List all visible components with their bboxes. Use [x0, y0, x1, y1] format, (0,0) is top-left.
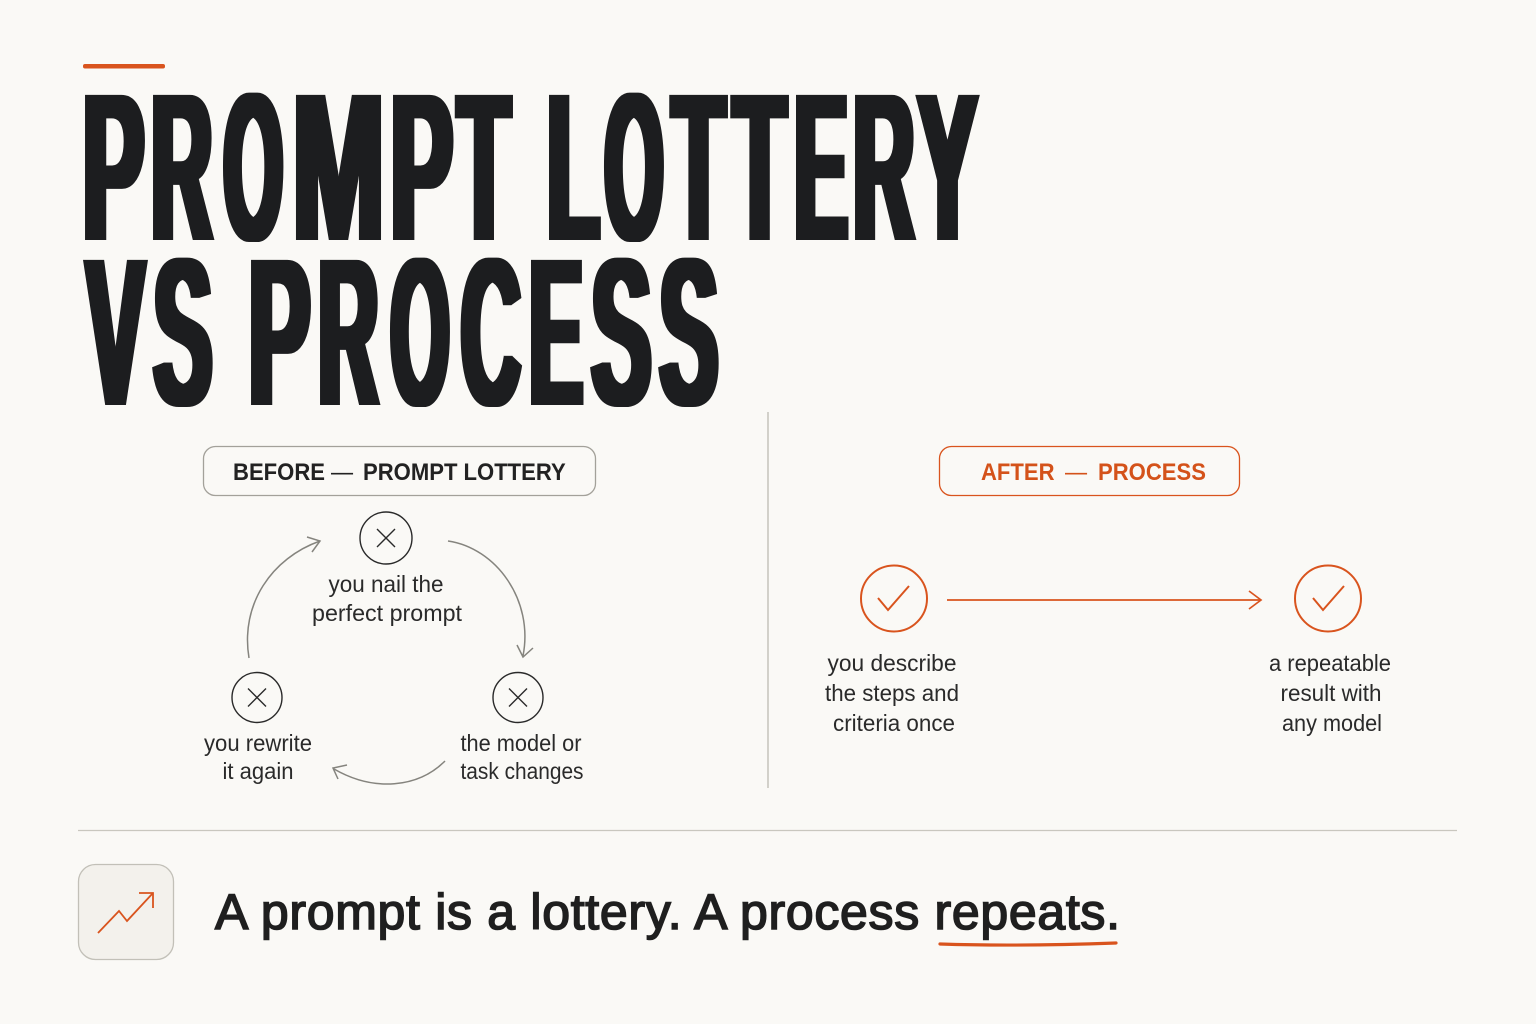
text: you rewrite it again: it again: [222, 758, 294, 784]
after label pill: [940, 446, 1240, 496]
title: E: [530, 214, 583, 450]
before label pill: BEFORE: [233, 458, 331, 485]
title: P: [249, 214, 310, 450]
panel: after: [825, 446, 1391, 736]
text: you describe the steps and criteria once: criteria once: [833, 710, 955, 736]
takeaway statement: A prompt is a lottery. A process repeats.: [215, 884, 1120, 940]
after label pill: PROCESS: [1098, 458, 1206, 485]
accent bar: [83, 64, 165, 68]
icon: check end: [1295, 566, 1361, 632]
text: the model or task changes: [460, 730, 584, 784]
title: [83, 49, 977, 450]
text: a repeatable result with any model: a repeatable: [1269, 650, 1391, 676]
text: you rewrite it again: [204, 730, 312, 784]
before label pill: PROMPT LOTTERY: [363, 458, 566, 485]
vertical divider: [767, 412, 769, 788]
title: S: [660, 214, 718, 450]
title: M: [293, 49, 384, 285]
panel: before: [204, 446, 596, 784]
text: you describe the steps and criteria once: the steps and: [825, 680, 959, 706]
text: you describe the steps and criteria once: [825, 650, 959, 736]
text: the model or task changes: task changes: [460, 758, 584, 784]
horizontal divider: [78, 830, 1457, 832]
title: E: [795, 49, 848, 285]
text: a repeatable result with any model: result with: [1280, 680, 1382, 706]
text: you nail the perfect prompt: [312, 571, 463, 626]
icon: trend chart tile: [78, 864, 174, 960]
title: S: [592, 214, 651, 450]
text: you nail the perfect prompt: you nail the: [328, 571, 444, 597]
icon: x top: [360, 512, 412, 564]
text: Y: [918, 49, 977, 285]
title: T: [458, 49, 510, 285]
before label pill: [204, 446, 596, 496]
title: V: [86, 214, 145, 450]
title: R: [853, 49, 914, 285]
title: R: [318, 214, 378, 450]
arrow: process: [947, 591, 1261, 609]
underline: repeats: [940, 943, 1116, 945]
icon: x left: [232, 672, 282, 722]
text: you describe the steps and criteria once: you describe: [828, 650, 956, 676]
title: T: [672, 49, 725, 285]
arrow: top to right: [448, 541, 533, 657]
text: a repeatable result with any model: [1269, 650, 1391, 736]
icon: check start: [861, 566, 927, 632]
title: O: [391, 214, 449, 450]
title: O: [605, 49, 663, 285]
title: P: [391, 49, 453, 285]
title: S: [154, 214, 212, 450]
icon: x right: [493, 672, 543, 722]
text: you nail the perfect prompt: perfect prompt: [312, 600, 463, 626]
title: C: [461, 214, 520, 450]
title: O: [224, 49, 283, 285]
title: P: [83, 49, 144, 285]
title: L: [547, 49, 600, 285]
text: a repeatable result with any model: any model: [1282, 710, 1382, 736]
arrow: left to top: [247, 537, 320, 658]
text: the model or task changes: the model or: [460, 730, 582, 756]
before label pill: —: [331, 458, 359, 485]
text: you rewrite it again: you rewrite: [204, 730, 312, 756]
after label pill: —: [1065, 458, 1093, 485]
title: T: [733, 49, 786, 285]
title: R: [151, 49, 212, 285]
after label pill: AFTER: [981, 458, 1061, 485]
arrow: right to left: [333, 761, 445, 784]
